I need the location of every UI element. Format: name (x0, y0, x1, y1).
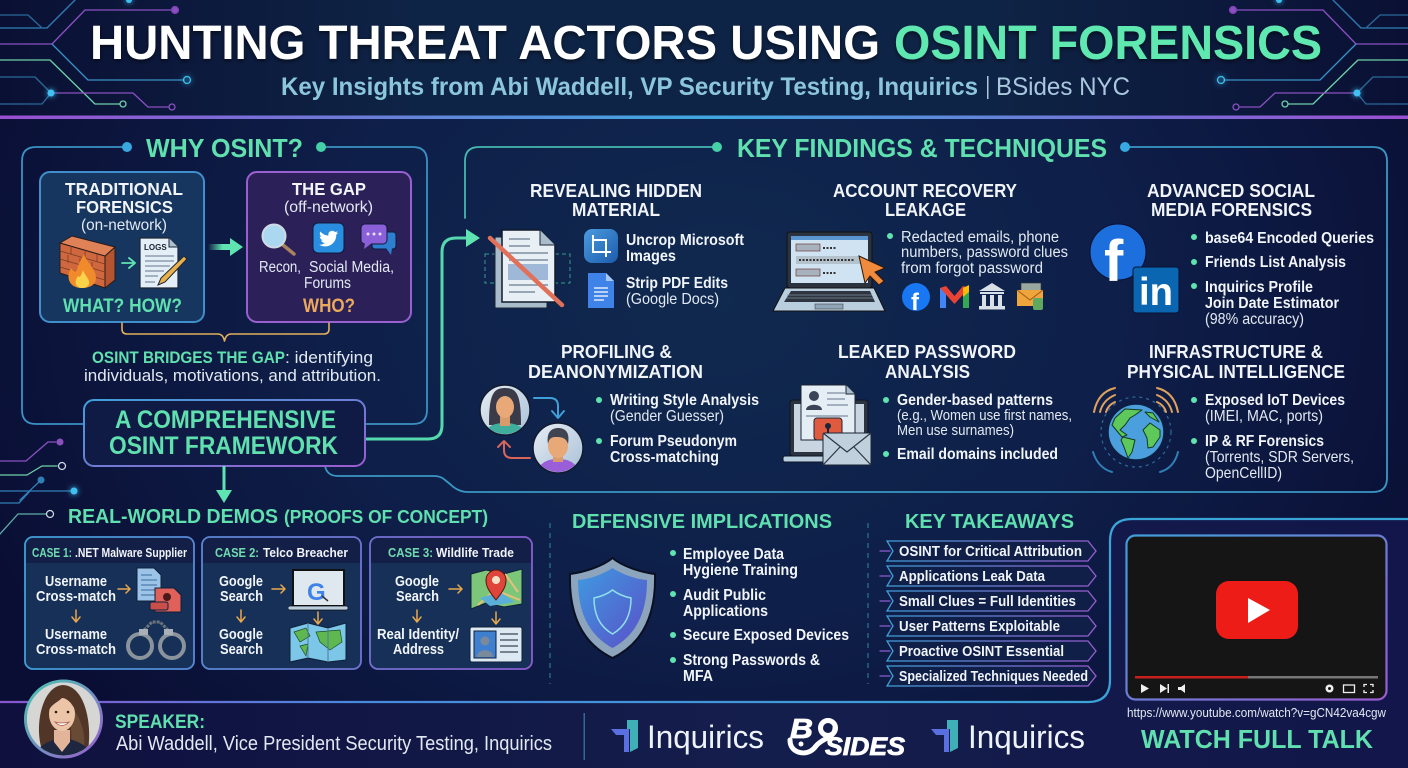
heading: real-world demos: (PROOFS OF CONCEPT) (284, 506, 488, 527)
panel: defensive implications (570, 510, 849, 685)
card: traditional forensics (40, 172, 204, 322)
case 3: CASE 3: (388, 545, 433, 560)
card: the gap: THE GAP (292, 179, 366, 199)
icon: shield (570, 558, 655, 658)
title (90, 17, 1322, 70)
case 1: Cross-match (36, 641, 116, 658)
case 2: CASE 2: (215, 545, 259, 560)
icon: Facebook: f (1104, 229, 1124, 294)
finding: account recovery leakage: numbers, password clues (901, 244, 1068, 261)
case 2: Search (220, 641, 263, 658)
finding: leaked password analysis: Email domains included (897, 446, 1058, 463)
case 1: .NET Malware Supplier (75, 545, 187, 560)
takeaway 5 (880, 641, 1096, 661)
box: comprehensive OSINT framework (84, 400, 365, 466)
icon: handcuffs (128, 622, 184, 658)
icon: crop tool (584, 229, 618, 263)
why OSINT frame (22, 142, 427, 424)
takeaway 4: User Patterns Exploitable (899, 619, 1060, 635)
header circuit traces left (0, 0, 190, 110)
icon: documents with malware (137, 568, 181, 612)
connector: key findings frame (325, 142, 1387, 492)
case 2 (202, 537, 361, 669)
panel: key findings (480, 133, 1374, 482)
text: OSINT bridges the gap: OSINT BRIDGES THE GAP (92, 348, 285, 367)
finding: infrastructure and physical intelligence: OpenCellID) (1205, 465, 1282, 482)
icon: laptop with form (773, 232, 885, 311)
text: OSINT bridges the gap (84, 348, 381, 385)
icon: Gmail (940, 285, 969, 308)
icon: Facebook small: f (911, 289, 920, 316)
case 3: Real Identity/ (377, 626, 460, 643)
finding: leaked password analysis: Men use surnames) (897, 423, 1014, 439)
finding: advanced social media forensics: Friends List Analysis (1205, 254, 1346, 271)
footer frame line (0, 519, 1408, 702)
finding: leaked password analysis: ANALYSIS (885, 362, 970, 382)
logo: BSides (790, 713, 905, 761)
finding: leaked password analysis: LEAKED PASSWORD (838, 342, 1016, 362)
card: traditional forensics: FORENSICS (76, 197, 173, 217)
player controls (1141, 684, 1373, 693)
divider: defensive and takeaways (867, 523, 869, 684)
finding: revealing hidden material: (Google Docs) (626, 291, 719, 308)
finding: revealing hidden material: Uncrop Microsoft (626, 232, 745, 249)
finding: account recovery leakage: LEAKAGE (885, 200, 966, 220)
takeaway 2 (880, 566, 1096, 586)
finding: infrastructure and physical intelligence: IP & RF Forensics (1205, 433, 1324, 450)
finding: profiling and deanonymization: DEANONYMIZATION (528, 362, 703, 382)
finding: advanced social media forensics: (98% accuracy) (1205, 311, 1304, 328)
takeaway 2: Applications Leak Data (899, 569, 1046, 585)
panel: defensive implications: MFA (683, 668, 713, 685)
arrow: firewall to logs (122, 258, 135, 268)
icon: map pin (471, 569, 522, 609)
logo: BSides: B (790, 713, 813, 744)
panel: defensive implications: Applications (683, 603, 768, 620)
heading: key findings: KEY FINDINGS & TECHNIQUES (737, 133, 1107, 163)
speaker text (115, 712, 552, 755)
finding: profiling and deanonymization: (Gender Guesser) (610, 408, 724, 425)
icon: woman avatar (480, 385, 530, 436)
icon: man avatar (533, 423, 583, 474)
icon: logs document: LOGS (144, 243, 167, 252)
takeaway 5: Proactive OSINT Essential (899, 644, 1064, 660)
finding: account recovery leakage (773, 181, 1068, 316)
finding: infrastructure and physical intelligence: (Torrents, SDR Servers, (1205, 449, 1354, 466)
finding: infrastructure and physical intelligence: Exposed IoT Devices (1205, 392, 1345, 409)
finding: infrastructure and physical intelligence: INFRASTRUCTURE & (1149, 342, 1323, 362)
icon: mail folder (1017, 283, 1043, 310)
header circuit traces right (1218, 0, 1408, 110)
logo: Inquirics: Inquirics (647, 719, 764, 755)
takeaway 6: Specialized Techniques Needed (899, 669, 1088, 685)
icon: Facebook small (902, 283, 930, 316)
icon: YouTube play button (1216, 581, 1298, 639)
icon: cropped document (485, 230, 570, 308)
icon: firewall (60, 236, 115, 288)
arrow: blue cycle (534, 398, 564, 418)
finding: leaked password analysis: (e.g., Women use first names, (897, 408, 1072, 424)
panel: defensive implications: Hygiene Training (683, 562, 798, 579)
finding: leaked password analysis: Gender-based patterns (897, 392, 1053, 409)
takeaway 3: Small Clues = Full Identities (899, 594, 1076, 610)
takeaway 4 (880, 616, 1096, 636)
case 2: Google (219, 573, 263, 590)
card: traditional forensics: (on-network) (81, 217, 167, 234)
finding: profiling and deanonymization (480, 342, 759, 474)
case 3: Wildlife Trade (436, 545, 514, 560)
icon: bank (979, 283, 1005, 310)
text: OSINT bridges the gap: individuals, motivations, and attribution. (84, 366, 381, 385)
speaker text: SPEAKER: (115, 712, 205, 733)
divider: demos and defensive (549, 523, 551, 684)
icon: ID card (470, 627, 522, 662)
icon: leaked password document and envelope (783, 385, 871, 465)
case 1: Username (45, 626, 107, 643)
bracket (122, 323, 329, 341)
finding: profiling and deanonymization: Writing Style Analysis (610, 392, 759, 409)
text: OSINT bridges the gap: : identifying (285, 348, 373, 367)
icon: Google Docs (588, 273, 614, 308)
icon: forum bubbles (361, 224, 396, 255)
case 1: Cross-match (36, 588, 116, 605)
icon: globe with signal arcs (1093, 388, 1178, 472)
finding: revealing hidden material: MATERIAL (572, 200, 660, 220)
heading: key takeaways: KEY TAKEAWAYS (905, 510, 1074, 533)
subtitle: Key Insights from Abi Waddell, VP Security Testing, Inquirics (281, 73, 978, 101)
case 1: Username (45, 573, 107, 590)
heading: real-world demos: REAL-WORLD DEMOS (68, 506, 278, 528)
panel: defensive implications: Audit Public (683, 587, 766, 604)
card: the gap: (off-network) (284, 199, 373, 216)
icon: twitter (313, 223, 344, 253)
icon: magnifier (262, 224, 294, 254)
panel: defensive implications: Employee Data (683, 546, 784, 563)
finding: advanced social media forensics: base64 Encoded Queries (1205, 230, 1374, 247)
icon: world map (290, 623, 346, 662)
video URL: https://www.youtube.com/watch?v=gCN42va4cgw (1127, 706, 1387, 720)
finding: account recovery leakage: Redacted emails, phone (901, 229, 1059, 246)
footer divider (584, 713, 585, 760)
icon: LinkedIn: in (1139, 271, 1173, 314)
finding: account recovery leakage: ACCOUNT RECOVERY (833, 181, 1017, 201)
icon: laptop with Google (288, 570, 348, 610)
case 3: Google (395, 573, 439, 590)
finding: profiling and deanonymization: PROFILING & (561, 342, 672, 362)
box: comprehensive OSINT framework: OSINT FRAMEWORK (109, 432, 338, 460)
header divider (0, 116, 1408, 119)
finding: infrastructure and physical intelligence (1093, 342, 1354, 482)
title: OSINT FORENSICS (894, 17, 1322, 70)
card: the gap: Forums (304, 275, 351, 292)
panel: key takeaways (880, 510, 1096, 686)
finding: advanced social media forensics: MEDIA FORENSICS (1151, 200, 1312, 220)
takeaway 6 (880, 666, 1096, 686)
speaker photo (26, 681, 102, 760)
case 3: Search (396, 588, 439, 605)
heading: real-world demos (68, 506, 488, 528)
lower-left circuit traces (0, 438, 78, 534)
icon: logs document (140, 238, 187, 288)
case 1: CASE 1: (32, 545, 72, 560)
arrow: framework to demos (216, 466, 232, 503)
finding: infrastructure and physical intelligence: PHYSICAL INTELLIGENCE (1127, 362, 1345, 382)
finding: leaked password analysis (783, 342, 1072, 465)
speaker text: Abi Waddell, Vice President Security Testing, Inquirics (116, 733, 552, 755)
logo: Inquirics second: Inquirics (968, 719, 1085, 755)
heading: defensive implications: DEFENSIVE IMPLICATIONS (572, 510, 832, 533)
box: comprehensive OSINT framework: A COMPREHENSIVE (115, 406, 336, 434)
logo: BSides: SIDES (825, 733, 905, 761)
arrows (72, 585, 130, 622)
finding: profiling and deanonymization: Forum Pseudonym (610, 433, 737, 450)
finding: account recovery leakage: from forgot password (901, 260, 1043, 277)
panel: defensive implications: Strong Passwords & (683, 652, 820, 669)
finding: advanced social media forensics: Join Date Estimator (1205, 295, 1339, 312)
card: the gap: Recon, (259, 259, 301, 276)
icon: Facebook (1090, 224, 1146, 294)
panel: why OSINT (22, 133, 427, 424)
arrow: framework to key findings (365, 229, 480, 439)
case 2: Telco Breacher (263, 545, 348, 560)
case 3: Address (393, 641, 444, 658)
case 3 (370, 537, 532, 669)
finding: revealing hidden material: REVEALING HIDDEN (530, 181, 702, 201)
case 2: Google (219, 626, 263, 643)
case 2: Search (220, 588, 263, 605)
heading: why OSINT: WHY OSINT? (146, 133, 303, 163)
finding: infrastructure and physical intelligence: (IMEI, MAC, ports) (1205, 408, 1323, 425)
card: the gap (247, 172, 411, 322)
title: HUNTING THREAT ACTORS USING (90, 17, 880, 70)
arrow: traditional to gap (208, 238, 243, 256)
finding: revealing hidden material: Images (626, 248, 676, 265)
finding: advanced social media forensics (1090, 181, 1374, 328)
card: traditional forensics: WHAT? HOW? (63, 296, 182, 317)
finding: advanced social media forensics: Inquirics Profile (1205, 279, 1313, 296)
icon: LinkedIn (1133, 267, 1179, 314)
finding: profiling and deanonymization: Cross-matching (610, 449, 719, 466)
video player (1126, 536, 1386, 700)
card: traditional forensics: TRADITIONAL (65, 179, 183, 199)
finding: advanced social media forensics: ADVANCED SOCIAL (1147, 181, 1315, 201)
panel: video (1126, 536, 1387, 754)
arrows (237, 585, 322, 624)
panel: defensive implications: Secure Exposed Devices (683, 627, 849, 644)
finding: revealing hidden material (485, 181, 745, 308)
finding: revealing hidden material: Strip PDF Edits (626, 275, 728, 292)
card: the gap: Social Media, (309, 259, 394, 276)
watch full talk: WATCH FULL TALK (1141, 724, 1373, 754)
subtitle: BSides NYC (996, 73, 1130, 101)
arrow: red cycle (498, 441, 530, 458)
case 1 (25, 537, 194, 669)
icon: laptop with Google: G (307, 579, 326, 606)
panel: real-world demos (25, 506, 532, 669)
card: the gap: WHO? (303, 296, 355, 317)
arrows (413, 585, 500, 624)
takeaway 1: OSINT for Critical Attribution (899, 544, 1082, 560)
progress bar (1135, 676, 1378, 678)
